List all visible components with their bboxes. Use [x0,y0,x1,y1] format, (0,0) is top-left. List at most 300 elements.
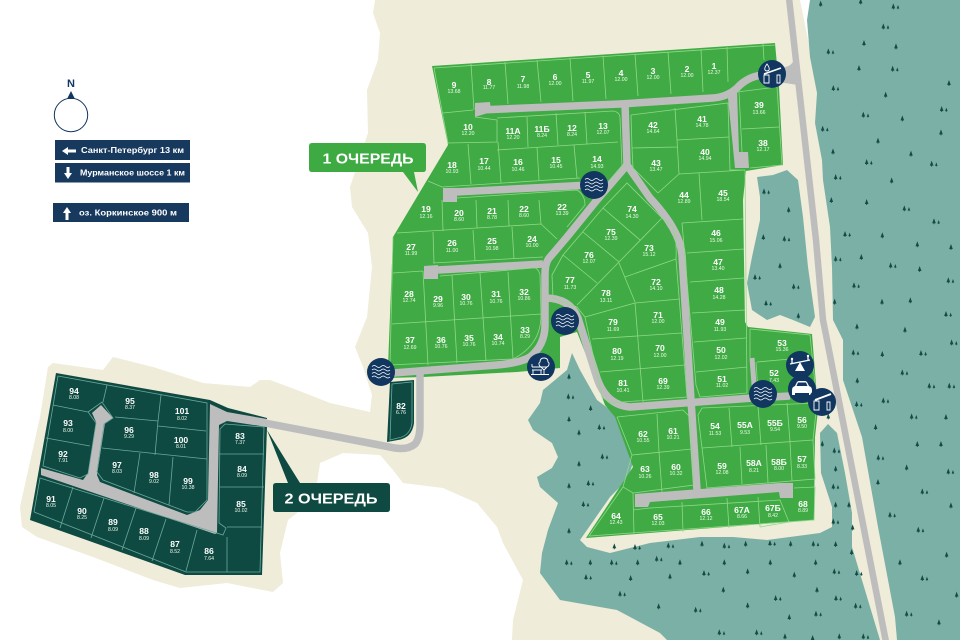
lot 100: 100 [174,435,188,445]
sign: Saint Petersburg: Санкт-Петербург 13 км [81,145,184,155]
lot 64: 12.43 [610,520,623,526]
lot 26: 26 [447,238,457,248]
lot 19 [420,204,433,220]
lot 33 [520,325,530,340]
lot 29: 9.96 [433,303,443,309]
sign: Murmansk highway [55,163,190,182]
lot 18 [446,160,459,175]
lot 99: 10.38 [182,485,195,491]
lot 68 [798,499,808,514]
lot 48 [713,285,726,301]
lot 43 [650,158,663,173]
lot 62: 62 [638,429,648,439]
lot 55A: 55А [737,420,753,430]
lot 42: 14.64 [647,129,660,135]
forest: middle [747,170,815,327]
lot 40 [699,147,712,162]
lot 51: 11.02 [716,383,728,389]
lot 57 [797,454,807,470]
lot 62: 10.55 [637,438,650,444]
lot 69 [657,376,670,391]
lot 43: 13.47 [650,167,663,173]
lot 48: 14.28 [713,295,726,301]
lot 33: 33 [520,325,530,335]
lot 33: 8.29 [520,334,530,340]
lot 11B [534,124,550,139]
lot 54: 54 [710,421,720,431]
lot 46 [710,228,723,244]
lot 20 [454,208,464,223]
lot 20: 8.60 [454,217,464,223]
lot 82 [387,380,414,442]
lot 11A: 12.20 [507,135,520,141]
lot 37 [404,335,417,351]
lot 34: 34 [493,332,503,342]
lot 97: 97 [112,460,122,470]
lot 14: 14 [592,154,602,164]
lot 73: 15.12 [643,252,656,258]
phase 2 dark land [30,373,267,575]
lot 55B [767,418,783,433]
lot 6: 12.00 [549,81,562,87]
lot 19: 12.16 [420,214,433,220]
lot 11A [505,126,521,141]
lot 52: 7.43 [769,378,779,384]
lot 30: 30 [461,292,471,302]
lot 56: 56 [797,415,807,425]
lot 66: 66 [701,507,711,517]
forest: east [807,0,960,640]
lot 97: 8.03 [112,469,122,475]
lot 55B: 55Б [767,418,783,428]
lot 80: 12.19 [611,356,624,362]
lot 90: 90 [77,506,87,516]
lot 31 [490,289,503,305]
lot 78 [600,288,612,304]
lot 71: 71 [653,310,663,320]
lot 15 [550,155,563,170]
lot 16 [512,157,525,173]
lot 93 [63,418,73,434]
lot 24: 10.00 [526,243,539,249]
lot 63 [639,464,652,480]
lot 56 [797,415,807,430]
lot 47: 13.40 [712,266,725,272]
lot 65: 12.03 [652,521,665,527]
lot 85 [235,499,248,514]
lot 69: 69 [658,376,668,386]
lot 59: 12.08 [716,470,729,476]
lot 22 [519,204,529,219]
lot 16: 16 [513,157,523,167]
lot 53: 53 [777,338,787,348]
lot 43: 43 [651,158,661,168]
lot 45 [717,188,730,203]
lot 18: 18 [447,160,457,170]
lot 45: 45 [718,188,728,198]
lot 9: 9 [452,80,457,90]
lot 14 [591,154,604,170]
lot 28 [403,289,416,304]
lot 68: 68 [798,499,808,509]
lot 96: 96 [124,425,134,435]
lot 15: 15 [551,155,561,165]
lot 59 [716,461,729,476]
plot labels: phase 1 [403,61,808,527]
lot 90 [77,506,87,521]
lot 65: 65 [653,512,663,522]
lot 70: 70 [655,343,665,353]
lot 44 [678,190,691,205]
lot 15: 10.45 [550,164,563,170]
lot 58B: 8.00 [774,466,784,472]
lot 38: 12.17 [757,147,770,153]
trees: middle forest [753,188,800,319]
lot 28: 28 [404,289,414,299]
plot labels: phase 2 [46,386,406,562]
lot 86 [204,546,214,562]
lot 21: 8.78 [487,215,497,221]
lot 52: 52 [769,368,779,378]
lot 22 east: 13.39 [556,211,569,217]
lot 10 [462,122,475,137]
callout: phase 2: 2 ОЧЕРЕДЬ [284,490,378,508]
lot 88 [139,526,149,542]
lot 25: 10.98 [486,246,499,252]
lot 77: 77 [565,275,575,285]
forest: south [528,353,880,640]
lot 13: 13 [598,121,608,131]
lot 84: 84 [237,464,247,474]
lot 80: 80 [612,346,622,356]
lot 81: 10.41 [617,388,630,394]
lot 3: 3 [651,66,656,76]
lot 12: 8.24 [567,132,577,138]
lot 100: 8.01 [176,444,186,450]
lot 46: 15.06 [710,238,723,244]
lot 2: 2 [685,64,690,74]
lot 47: 47 [713,257,723,267]
lot 89: 89 [108,517,118,527]
lot 79 [607,317,619,333]
phase 2 roads [41,404,267,534]
lot 101 [175,406,189,422]
lot 13: 12.07 [597,130,610,136]
lot 84: 8.09 [237,473,247,479]
icon: entry barrier south [808,388,836,416]
lot 78: 78 [601,288,611,298]
sign: Murmansk highway: Мурманское шоссе 1 км [80,168,185,178]
lot 85: 10.02 [235,508,248,514]
lot 55A [737,420,753,436]
lot 71: 12.00 [652,319,665,325]
lot 19: 19 [421,204,431,214]
lot 32: 32 [519,287,529,297]
lot 91: 91 [46,494,56,504]
lot 95: 95 [125,396,135,406]
lot 54: 11.53 [709,431,721,437]
sign: Korkinskoe lake [53,203,189,222]
icon: car parking [788,375,816,403]
lot 76: 76 [584,250,594,260]
lot 98 [149,470,159,485]
lot 31: 31 [491,289,501,299]
lot 17 [478,156,491,172]
lot 1: 1 [712,61,717,71]
lot 74: 14.30 [626,214,639,220]
lot 96 [124,425,134,440]
lot 8 [483,77,495,91]
lot 35: 35 [464,333,474,343]
sign: Korkinskoe lake: оз. Коркинское 900 м [79,208,177,218]
lot 34 [492,332,505,347]
lot 40: 40 [700,147,710,157]
lot 42 [647,120,660,135]
lot 5 [582,70,594,85]
lot 25 [486,236,499,252]
lot 11B: 11Б [534,124,550,134]
lot 12 [567,123,577,138]
lot 76: 12.07 [583,259,596,265]
lot 82 label: 82 [396,401,406,411]
lot 8: 11.77 [483,85,495,91]
icon: water at north pond [580,171,608,199]
lot 63: 10.26 [639,474,652,480]
lot 67A [734,505,750,520]
lot 48: 48 [714,285,724,295]
lot 73 [643,243,656,258]
lot 30 [460,292,473,307]
lot 41: 14.78 [696,123,709,129]
lot 82 label [396,401,406,416]
lot 61: 10.21 [667,435,680,441]
lot 62 [637,429,650,444]
lot 69: 12.39 [657,385,670,391]
lot 22 east [556,202,569,217]
panel: phase 1 site [388,43,818,538]
lot 50 [715,345,728,361]
sign: Saint Petersburg [55,140,190,160]
lot 41 [696,114,709,129]
lot 41: 41 [697,114,707,124]
phase 1 green land [388,43,818,538]
lot 68: 8.89 [798,508,808,514]
lot 85: 85 [236,499,246,509]
lot 101: 101 [175,406,189,416]
lot 32: 10.86 [518,296,531,302]
lot 82 inner outline [390,382,412,440]
lot 74: 74 [627,204,637,214]
panel: phase 2 site [30,372,420,575]
lot 12: 12 [567,123,577,133]
lot 5: 5 [586,70,591,80]
lot 72 [650,277,663,292]
lot 51 [716,374,728,389]
lot 11B: 8.24 [537,133,547,139]
lot 24 [526,234,539,249]
lot 4 [615,68,628,83]
lot 74 [626,204,639,220]
icon: entry barrier north with drop [758,60,786,88]
lot 99 [182,476,195,491]
lot 86: 7.64 [204,556,214,562]
lot 3 [647,66,660,81]
lot 39: 13.66 [753,110,766,116]
lot 49 [714,317,726,333]
lot 64 [610,511,623,526]
lot 94 [69,386,79,401]
lot 91: 8.05 [46,503,56,509]
lot 83: 83 [235,431,245,441]
lot 58B [771,457,787,472]
lot 67B: 67Б [765,503,781,513]
lot 95: 8.37 [125,405,135,411]
lot 38: 38 [758,138,768,148]
lot 70: 12.00 [654,353,667,359]
lot 44: 12.89 [678,199,691,205]
lot 36: 10.76 [435,344,448,350]
lot 57: 8.33 [797,464,807,470]
lot 22: 8.60 [519,213,529,219]
lot 37: 37 [405,335,415,345]
lot 66 [700,507,713,522]
lot 94: 94 [69,386,79,396]
lot 78: 13.11 [600,298,612,304]
lot 98: 98 [149,470,159,480]
lot 6: 6 [553,72,558,82]
lot 53: 15.36 [776,347,789,353]
lot 58B: 58Б [771,457,787,467]
phase 1 roads [393,58,798,507]
lot 37: 12.69 [404,345,417,351]
callout: phase 2 [267,430,390,512]
lot 67A: 8.66 [737,514,747,520]
lot 2: 12.00 [681,73,694,79]
lot 11A: 11А [505,126,521,136]
lot 49: 11.93 [714,327,726,333]
lot 35 [463,333,476,348]
compass: N [67,78,75,90]
lot 77: 11.73 [564,285,576,291]
lot 35: 10.76 [463,342,476,348]
lot 40: 14.94 [699,156,712,162]
lot 81: 81 [618,378,628,388]
lot 70 [654,343,667,359]
lot 29 [433,294,443,309]
lot 1: 12.37 [708,70,721,76]
icon: playground seesaw [786,351,814,379]
lot 46: 46 [711,228,721,238]
lot 97 [112,460,122,475]
lot 4: 12.00 [615,77,628,83]
lot 67A: 67А [734,505,750,515]
lot 7: 7 [521,74,526,84]
lot 25: 25 [487,236,497,246]
lot 98: 9.02 [149,479,159,485]
lot 24: 24 [527,234,537,244]
lot 9: 13.68 [448,89,461,95]
lot 53 [776,338,789,353]
lot 17: 10.44 [478,166,491,172]
lot 21 [487,206,497,221]
lot 72: 14.10 [650,286,663,292]
lot 52 [769,368,779,384]
lot 56: 9.50 [797,424,807,430]
lot 93: 8.00 [63,428,73,434]
lot 87 [170,539,180,555]
lot 58A: 8.21 [749,468,759,474]
lot 75: 12.39 [605,236,618,242]
lot 34: 10.74 [492,341,505,347]
lot 67B: 8.42 [768,513,778,519]
lot 50: 50 [716,345,726,355]
phase 1 lot boundaries [390,44,817,536]
lot 18: 10.93 [446,169,459,175]
lot 6 [549,72,562,87]
icon: park with tree and bench [527,353,555,381]
main highway [789,0,886,640]
lot 80 [611,346,624,362]
lot 75 [605,227,618,242]
lot 91 [46,494,56,509]
lot 42: 42 [648,120,658,130]
lot 63: 63 [640,464,650,474]
lot 39 [753,100,766,116]
lot 94: 8.08 [69,395,79,401]
lot 89 [108,517,118,533]
lot 27 [405,242,417,257]
lot 81 [617,378,630,394]
lot 1 [708,61,721,76]
lot 84 [237,464,247,479]
phase 2 lot boundaries [34,376,264,572]
lot 67B [765,503,781,519]
lot 27: 27 [406,242,416,252]
lot 55B: 9.54 [770,427,780,433]
lot 16: 10.46 [512,167,525,173]
lot 95 [125,396,135,411]
lot 87: 87 [170,539,180,549]
lot 58A: 58А [746,458,762,468]
connector road between phases [265,372,420,448]
lot 57: 57 [797,454,807,464]
lot 58A [746,458,762,474]
lot 65 [652,512,665,527]
lot 47 [712,257,725,272]
lot 10: 12.20 [462,131,475,137]
lot 101: 8.02 [177,416,187,422]
lot 82 label: 6.76 [396,410,406,416]
lot 66: 12.12 [700,516,713,522]
lot 17: 17 [479,156,489,166]
lot 26 [446,238,458,254]
lot 2 [681,64,694,79]
lot 72: 72 [651,277,661,287]
lot 44: 44 [679,190,689,200]
lot 77 [564,275,576,291]
lot 20: 20 [454,208,464,218]
lot 50: 12.02 [715,355,728,361]
compass [54,78,88,132]
lot 60: 10.32 [670,471,683,477]
lot 36: 36 [436,335,446,345]
lot 92: 7.91 [58,458,68,464]
icon: water at south-east [749,380,777,408]
lot 9 [448,80,461,95]
lot 96: 9.29 [124,434,134,440]
lot 14: 14.93 [591,164,604,170]
lot 31: 10.76 [490,299,503,305]
